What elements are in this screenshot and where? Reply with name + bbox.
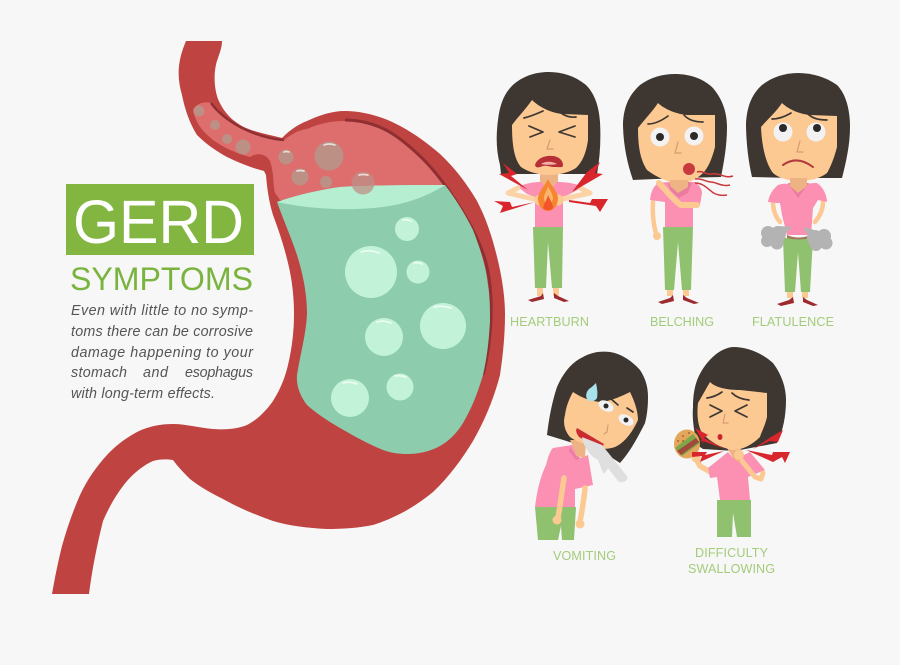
description text [71,303,254,402]
icon: vomit stream [582,437,627,482]
inner wall shadow upper [345,120,491,375]
gas bubbles [194,106,374,194]
icon: flame [538,179,558,211]
label: difficulty swallowing: DIFFICULTY [695,546,769,560]
icon: gas cloud left [761,226,792,250]
description text: esophagus [185,365,253,381]
gas-filled lumen [193,102,445,200]
figure: vomiting [535,352,648,540]
inner wall shadow [211,103,284,140]
icons: pain bolts [494,162,608,213]
description text: toms there can be corrosive [71,324,253,340]
title badge: GERD: GERD [73,188,244,256]
fluid surface [277,185,445,209]
stomach illustration [52,41,505,594]
figure: heartburn [494,72,608,302]
description text: with long-term effects. [71,386,215,402]
label: flatulence: FLATULENCE [752,315,834,329]
fluid bubbles [331,217,466,417]
icon: sweat drop [586,383,597,401]
description text: damage happening to your [71,345,254,361]
label: belching: BELCHING [650,315,714,329]
description text: Even with little to no symp- [71,303,253,319]
subtitle: SYMPTOMS: SYMPTOMS [70,261,253,297]
figure: flatulence [746,73,850,306]
label: vomiting: VOMITING [553,549,616,563]
label: heartburn: HEARTBURN [510,315,589,329]
figure: belching [623,74,733,304]
gastric fluid [277,185,490,454]
label: difficulty swallowing: SWALLOWING [688,562,775,576]
figure: difficulty swallowing [674,347,790,537]
icon: gas cloud right [803,227,832,251]
icons: pain bolts [692,428,790,463]
icon: burger [674,430,700,458]
description text: stomach [71,365,127,381]
description text: and [143,365,169,381]
icon: belch waves [695,172,733,195]
label: difficulty swallowing [688,546,775,576]
stomach wall [52,41,505,594]
